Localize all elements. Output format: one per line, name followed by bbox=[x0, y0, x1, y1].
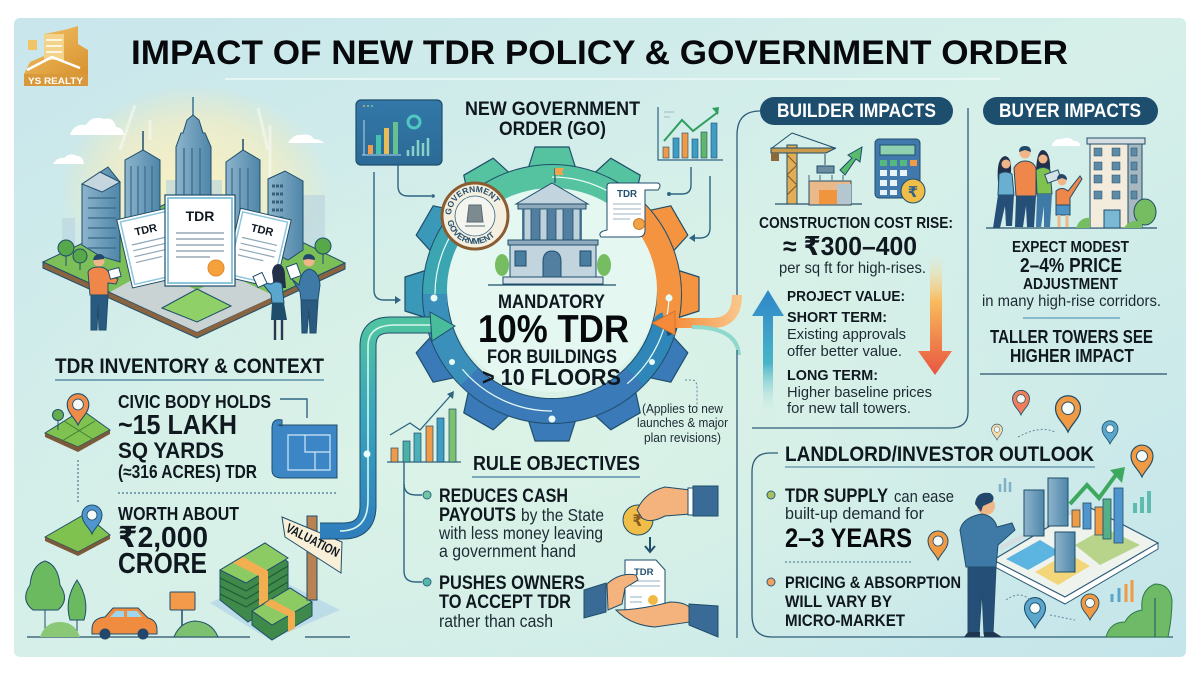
icon: dashboard bbox=[356, 100, 442, 165]
text block: pushes owners bbox=[439, 573, 585, 631]
pill: builder impacts bbox=[760, 97, 953, 125]
text block: reduces cash payouts: PAYOUTS bbox=[439, 505, 516, 526]
text block: pushes owners: rather than cash bbox=[439, 611, 553, 631]
pill: buyer impacts bbox=[983, 97, 1158, 125]
text: mandatory 10% TDR: > 10 FLOORS bbox=[482, 364, 621, 390]
text: project value: Higher baseline prices bbox=[787, 384, 932, 401]
panel: builder impacts bbox=[737, 97, 968, 428]
bullet text: TDR supply: 2–3 YEARS bbox=[785, 523, 912, 553]
certificate: left TDR bbox=[117, 208, 183, 288]
dotted connectors bbox=[78, 460, 336, 502]
arrow: project value up bbox=[752, 290, 784, 412]
text: expect modest: in many high-rise corridors. bbox=[982, 293, 1161, 310]
text: construction cost rise bbox=[759, 215, 953, 277]
text block: reduces cash payouts: with less money leaving bbox=[438, 523, 603, 543]
icon: hand with rupee coin bbox=[623, 486, 718, 552]
text: taller towers: HIGHER IMPACT bbox=[1010, 346, 1134, 366]
certificate: centre TDR bbox=[165, 195, 235, 286]
note: applies to new launches: (Applies to new bbox=[642, 401, 724, 416]
connectors: objectives bbox=[404, 462, 431, 586]
bullet text: TDR supply: can ease bbox=[894, 487, 954, 506]
bullet text: pricing and absorption: MICRO-MARKET bbox=[785, 611, 906, 630]
icon: investor with city map bbox=[960, 467, 1158, 637]
logo: YS Realty: YS REALTY bbox=[28, 76, 84, 87]
text: expect modest: EXPECT MODEST bbox=[1012, 239, 1129, 256]
bullet text: TDR supply bbox=[767, 486, 954, 553]
note: applies to new launches bbox=[637, 380, 729, 445]
note: applies to new launches: launches & major bbox=[637, 415, 729, 430]
heading: landlord outlook: LANDLORD/INVESTOR OUTLOOK bbox=[785, 443, 1094, 466]
gear: mandatory TDR cog bbox=[404, 146, 700, 442]
text: construction cost rise: per sq ft for high-rises. bbox=[779, 260, 926, 277]
text: mandatory 10% TDR: FOR BUILDINGS bbox=[487, 347, 617, 368]
pill: buyer impacts: BUYER IMPACTS bbox=[999, 101, 1141, 122]
text: construction cost rise: ≈ ₹300–400 bbox=[783, 231, 917, 261]
text block: worth about: CRORE bbox=[118, 548, 207, 580]
text block: reduces cash payouts: by the State bbox=[521, 505, 604, 525]
arrow: left pipe into gear bbox=[320, 312, 455, 531]
text: expect modest: 2–4% PRICE bbox=[1020, 255, 1122, 277]
text block: pushes owners: TO ACCEPT TDR bbox=[439, 592, 571, 613]
icon: land plot with blue pin bbox=[45, 505, 110, 556]
icon: money stacks with valuation sign bbox=[210, 516, 342, 640]
certificate: right TDR: TDR bbox=[250, 222, 274, 239]
icon: growth chart top right bbox=[658, 107, 723, 160]
panel: buyer impacts bbox=[980, 97, 1167, 374]
icon: hand with rupee coin: ₹ bbox=[632, 513, 644, 530]
text block: worth about: ₹2,000 bbox=[118, 522, 208, 554]
text block: reduces cash payouts: a government hand bbox=[439, 541, 576, 561]
text: project value bbox=[787, 288, 932, 417]
text block: worth about bbox=[118, 504, 239, 580]
icon: land plot with orange pin bbox=[45, 394, 110, 452]
bullet text: pricing and absorption bbox=[767, 573, 961, 630]
text block: civic body holds bbox=[118, 392, 271, 482]
street scene: trees, car, sign bbox=[26, 561, 350, 640]
text block: civic body holds: ~15 LAKH bbox=[118, 409, 237, 440]
icon: TDR scroll: TDR bbox=[617, 188, 637, 200]
text block: reduces cash payouts bbox=[438, 486, 604, 561]
text: construction cost rise: CONSTRUCTION COST RISE: bbox=[759, 215, 953, 232]
icon: government seal: GOVERNMENT bbox=[445, 186, 500, 214]
certificate: centre TDR: TDR bbox=[186, 208, 214, 224]
heading: new government order bbox=[465, 99, 640, 140]
icon: rising bar chart bbox=[387, 391, 461, 462]
icon: government building bbox=[488, 168, 616, 285]
heading: new government order: NEW GOVERNMENT bbox=[465, 99, 640, 120]
icon: map pins bbox=[928, 390, 1153, 628]
illustration: city skyline with TDR certificates bbox=[43, 85, 345, 340]
icon: government seal: GOVERNMENT bbox=[448, 220, 494, 244]
title: IMPACT OF NEW TDR POLICY & GOVERNMENT ORDER bbox=[131, 34, 1068, 72]
note: applies to new launches: plan revisions) bbox=[644, 430, 721, 445]
text block: civic body holds: CIVIC BODY HOLDS bbox=[118, 392, 271, 412]
icon: hands exchanging TDR document bbox=[584, 560, 718, 637]
heading: rule objectives: RULE OBJECTIVES bbox=[473, 452, 640, 475]
text: project value: SHORT TERM: bbox=[787, 309, 887, 326]
text: project value: Existing approvals bbox=[787, 326, 906, 343]
text: expect modest: ADJUSTMENT bbox=[1023, 276, 1118, 293]
text: taller towers: TALLER TOWERS SEE bbox=[990, 327, 1153, 347]
icon: TDR scroll bbox=[600, 183, 660, 237]
icon: small market charts bbox=[1000, 478, 1151, 602]
icon: calculator with rupee coin bbox=[875, 139, 925, 203]
text block: pushes owners: PUSHES OWNERS bbox=[439, 573, 585, 594]
text: project value: LONG TERM: bbox=[787, 367, 878, 384]
certificate: right TDR bbox=[225, 208, 291, 288]
icon: hands exchanging TDR document: TDR bbox=[634, 567, 654, 578]
icon: blueprint bbox=[272, 399, 337, 478]
text: taller towers bbox=[990, 327, 1153, 366]
certificate: left TDR: TDR bbox=[134, 222, 158, 239]
arrow: cost down bbox=[918, 254, 952, 375]
icon: money stacks with valuation sign: VALUATION bbox=[284, 520, 342, 560]
heading: new government order: ORDER (GO) bbox=[499, 119, 606, 140]
icon: family viewing apartment bbox=[986, 138, 1157, 228]
text block: civic body holds: (≈316 ACRES) TDR bbox=[118, 462, 257, 482]
bullet text: pricing and absorption: PRICING & ABSORPTION bbox=[785, 573, 961, 592]
icon: calculator with rupee coin: ₹ bbox=[908, 184, 918, 201]
text: project value: offer better value. bbox=[787, 343, 902, 360]
person: woman with tablet bbox=[253, 264, 287, 340]
bullet text: TDR supply: TDR SUPPLY bbox=[785, 486, 888, 507]
text: expect modest bbox=[982, 239, 1161, 310]
logo: YS Realty bbox=[24, 26, 88, 87]
person: orange shirt bbox=[88, 254, 121, 330]
text block: reduces cash payouts: REDUCES CASH bbox=[439, 486, 568, 507]
car bbox=[92, 608, 157, 640]
panel: landlord investor outlook bbox=[737, 350, 1173, 638]
icon: government seal bbox=[440, 182, 510, 250]
heading: TDR inventory & context: TDR INVENTORY & CONTEXT bbox=[55, 355, 324, 378]
connectors: dashboard to gear bbox=[374, 165, 435, 304]
arrow: orange into gear bbox=[652, 295, 739, 355]
icon: crane and rising cost bbox=[771, 133, 862, 205]
text: mandatory 10% TDR bbox=[478, 292, 629, 390]
bullet text: pricing and absorption: WILL VARY BY bbox=[785, 592, 893, 611]
pill: builder impacts: BUILDER IMPACTS bbox=[777, 101, 936, 122]
text: mandatory 10% TDR: 10% TDR bbox=[478, 308, 629, 351]
icon: trees bbox=[1106, 584, 1172, 637]
text block: civic body holds: SQ YARDS bbox=[118, 438, 224, 463]
text: project value: PROJECT VALUE: bbox=[787, 288, 905, 305]
connectors: chart to gear bbox=[667, 167, 710, 242]
text: mandatory 10% TDR: MANDATORY bbox=[498, 292, 605, 313]
bullet text: TDR supply: built-up demand for bbox=[785, 504, 924, 523]
text block: worth about: WORTH ABOUT bbox=[118, 504, 239, 524]
person: man in blue bbox=[286, 254, 320, 333]
text: project value: for new tall towers. bbox=[787, 400, 911, 417]
